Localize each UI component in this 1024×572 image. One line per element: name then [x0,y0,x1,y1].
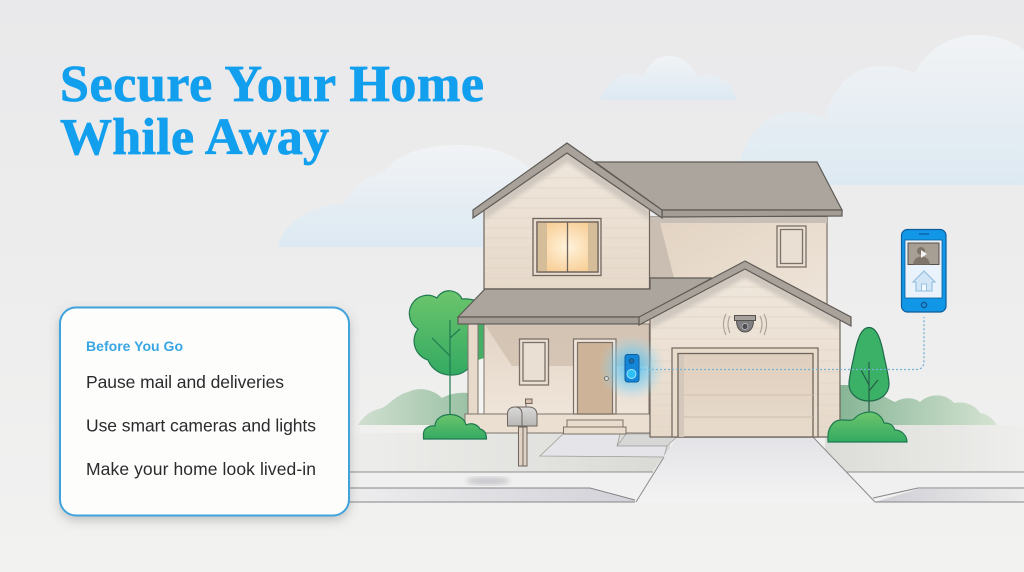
title [60,56,484,166]
cloud: small top [600,56,737,100]
curb right [873,488,1024,502]
porch roof [458,278,712,324]
panel: before you go [60,308,349,516]
cloud: large right [737,35,1024,185]
smart doorbell with glow [599,335,665,401]
cloud: middle left [278,145,532,247]
video thumbnail [908,243,939,264]
garage gable trim [639,261,851,326]
right tree [849,328,889,414]
connection dotted line [640,317,924,370]
house: right upper wall [640,217,827,332]
checklist: Use smart cameras and lights [86,416,316,436]
garage door [672,348,818,437]
panel heading: Before You Go [86,338,183,354]
background shrubs right [838,385,997,425]
title: Secure Your Home [60,56,484,113]
mailbox [466,399,537,485]
front door [574,339,616,414]
left tree [409,291,486,414]
house: upper gable [473,143,662,289]
upper gable trim [473,143,662,218]
home icon [913,271,935,291]
garage section [639,261,851,437]
steps [564,420,626,434]
ground and lawn [340,425,1024,502]
right foreground bush [828,412,907,442]
house: rear main roof [595,162,842,210]
smartphone [902,230,946,312]
checklist [86,372,316,479]
background shrubs left [358,389,486,425]
porch [465,324,650,434]
checklist: Make your home look lived-in [86,459,316,479]
lit window [533,218,601,276]
main roof fascia [662,210,842,217]
curb left [340,488,635,502]
porch window [520,339,548,385]
checklist: Pause mail and deliveries [86,372,284,392]
title: While Away [60,109,329,166]
security camera [724,314,766,335]
left foreground bush [424,414,486,439]
upper right window [777,226,806,267]
